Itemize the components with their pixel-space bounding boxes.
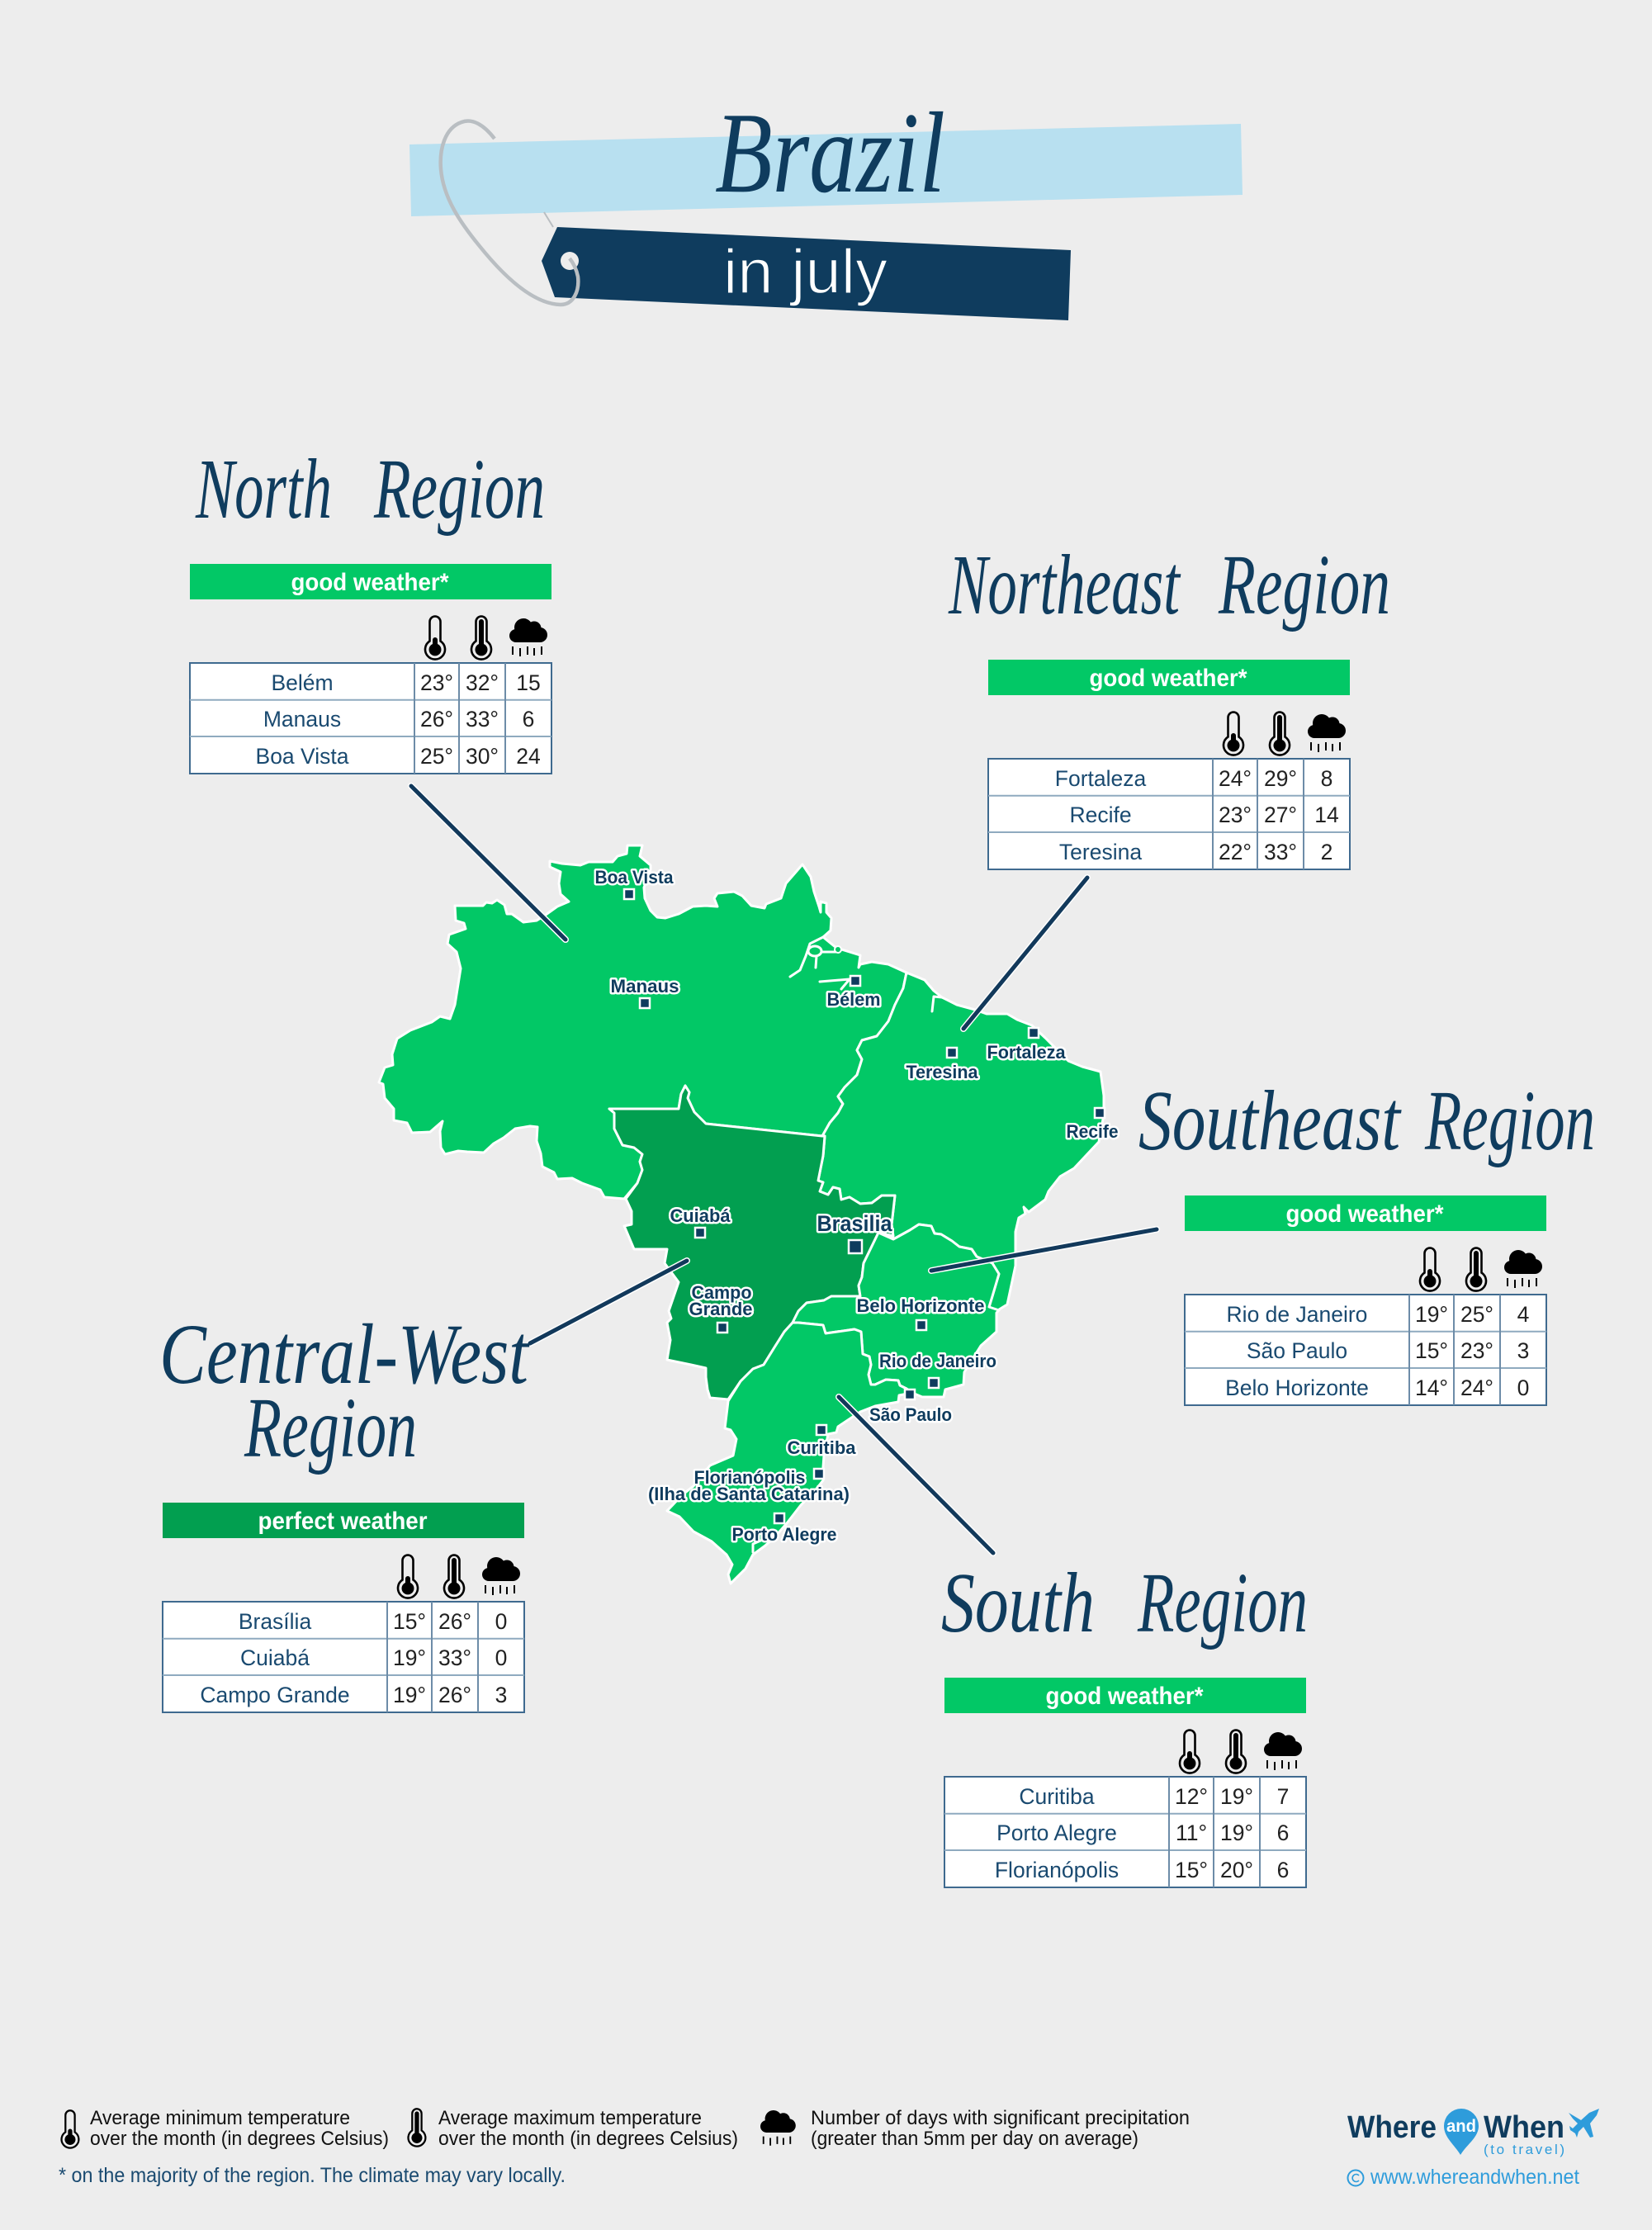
city labels: Florianópolis (693, 1467, 806, 1488)
city labels: Recife (1067, 1121, 1118, 1142)
region: South (667, 1323, 912, 1584)
heading: Central-West Region: Central-West (159, 1307, 530, 1402)
climate table: Florianópolis (995, 1858, 1119, 1882)
climate table (190, 663, 551, 774)
climate table: Belém (271, 670, 334, 695)
climate table: 8 (1321, 766, 1332, 791)
climate table: 0 (495, 1609, 507, 1634)
city labels (594, 867, 1118, 1545)
climate table: 19° (393, 1683, 426, 1707)
table icons (1180, 1730, 1302, 1773)
climate table: 2 (1321, 840, 1332, 864)
climate table: 11° (1176, 1820, 1207, 1845)
weather bar: good weather* (1286, 1200, 1444, 1228)
weather bar (190, 564, 551, 599)
climate table: 24° (1460, 1375, 1493, 1400)
climate table: 27° (1264, 803, 1297, 827)
weather bar (988, 660, 1350, 695)
climate table: 15° (1175, 1858, 1208, 1882)
region: Southeast (793, 1224, 999, 1397)
weather bar: good weather* (291, 569, 449, 596)
climate table: Cuiabá (240, 1645, 310, 1670)
city labels: (Ilha de Santa Catarina) (648, 1484, 850, 1504)
climate table: 26° (438, 1683, 471, 1707)
legend text: minimum temperature: over the month (in degrees Celsius) (90, 2128, 389, 2150)
climate table: 0 (495, 1645, 507, 1670)
city labels: São Paulo (869, 1404, 952, 1425)
city labels: Fortaleza (987, 1042, 1066, 1063)
climate table: 26° (438, 1609, 471, 1634)
tagline: (to travel) (1484, 2142, 1564, 2157)
climate table (1185, 1295, 1546, 1405)
city labels: Manaus (611, 976, 679, 997)
climate table: 19° (1415, 1302, 1448, 1327)
climate table: 0 (1517, 1375, 1529, 1400)
title: Brazil: Brazil (715, 89, 945, 217)
navy luggage tag (542, 227, 1071, 320)
climate table: Porto Alegre (996, 1820, 1117, 1845)
title block (409, 89, 1243, 320)
tag string thin segment (544, 212, 553, 227)
climate table: Manaus (263, 707, 341, 731)
city labels: Brasilia (817, 1211, 892, 1236)
city markers (624, 889, 1105, 1523)
light blue banner (409, 124, 1243, 216)
climate table: 15° (1415, 1338, 1448, 1363)
climate table: 4 (1517, 1302, 1529, 1327)
heading: Central-West Region: Region (244, 1380, 417, 1475)
weather bar (163, 1503, 524, 1538)
legend text: maximum temperature: over the month (in degrees Celsius) (438, 2128, 738, 2150)
legend text: minimum temperature: Average minimum temperature (90, 2107, 350, 2129)
climate table: 26° (420, 707, 453, 731)
heading: Northeast Region: Northeast (948, 537, 1181, 632)
climate table: 30° (466, 744, 499, 769)
city labels: Boa Vista (594, 867, 674, 888)
legend text: precipitation: Number of days with significant precipitation (811, 2107, 1190, 2129)
climate table: 19° (1220, 1820, 1253, 1845)
legend text: precipitation: (greater than 5mm per day on average) (811, 2128, 1138, 2150)
wordmark: When: When (1484, 2110, 1564, 2145)
climate table: 32° (466, 670, 499, 695)
climate table: 24° (1219, 766, 1252, 791)
weather bar: perfect weather (258, 1508, 428, 1535)
climate table: 23° (1219, 803, 1252, 827)
logo: Where and When (1347, 2109, 1599, 2189)
climate table: Recife (1069, 803, 1132, 827)
heading: South Region: South (941, 1555, 1095, 1650)
heading: South Region (941, 1555, 1308, 1650)
city labels: Teresina (906, 1062, 978, 1082)
climate table: Rio de Janeiro (1227, 1302, 1367, 1327)
city labels: Porto Alegre (731, 1524, 837, 1545)
panel: South Region (941, 1555, 1308, 1887)
climate table: 20° (1220, 1858, 1253, 1882)
panel: Northeast Region (948, 537, 1390, 869)
table icons (425, 616, 547, 660)
city labels: Campo (692, 1282, 751, 1303)
region: Northeast (818, 973, 1104, 1311)
climate table: 24 (516, 744, 541, 769)
city labels: Bélem (827, 989, 880, 1010)
legend text: precipitation (811, 2107, 1190, 2150)
climate table: Belo Horizonte (1225, 1375, 1369, 1400)
icon: airplane (1569, 2109, 1599, 2138)
climate table: 33° (1264, 840, 1297, 864)
climate table: 23° (420, 670, 453, 695)
panel: Southeast Region (1138, 1073, 1595, 1405)
climate table: 6 (523, 707, 534, 731)
website: www.whereandwhen.net (1370, 2166, 1579, 2189)
heading: Southeast Region: Southeast (1138, 1073, 1402, 1168)
region: Central-West (609, 1086, 895, 1399)
subtitle: in july: in july (723, 237, 888, 307)
climate table: Fortaleza (1055, 766, 1146, 791)
climate table: 6 (1277, 1820, 1289, 1845)
legend text: minimum temperature (90, 2107, 389, 2150)
climate table: 15° (393, 1609, 426, 1634)
table icons (1420, 1248, 1542, 1291)
climate table: 19° (1220, 1784, 1253, 1809)
heading: North Region (195, 442, 545, 537)
climate table (988, 759, 1350, 869)
climate table: 29° (1264, 766, 1297, 791)
icon: rain cloud (760, 2110, 796, 2146)
river mouth lines (790, 937, 850, 989)
climate table: 3 (1517, 1338, 1529, 1363)
coastal inlet (932, 997, 942, 1011)
climate table (944, 1777, 1306, 1887)
connector lines (411, 786, 1157, 1553)
city labels: Curitiba (788, 1437, 856, 1458)
weather bar: good weather* (1045, 1683, 1204, 1710)
legend text: maximum temperature: Average maximum temperature (438, 2107, 702, 2129)
lagoon line (753, 1534, 776, 1552)
weather bar (1185, 1195, 1546, 1231)
footnote: * on the majority of the region. The climate may vary locally. (59, 2164, 566, 2187)
climate table: Campo Grande (200, 1683, 350, 1707)
climate table: 19° (393, 1645, 426, 1670)
climate table: 14° (1415, 1375, 1448, 1400)
climate table: 7 (1277, 1784, 1289, 1809)
climate table: Brasília (239, 1609, 311, 1634)
copyright icon (1347, 2170, 1364, 2186)
legend (59, 2107, 1190, 2187)
panel: North Region (190, 442, 551, 774)
city labels: Cuiabá (670, 1205, 731, 1226)
table icons (398, 1555, 520, 1598)
table icons (1224, 712, 1346, 755)
icon: map pin (1444, 2109, 1479, 2155)
climate table: Curitiba (1019, 1784, 1095, 1809)
climate table: 25° (1460, 1302, 1493, 1327)
city labels: Grande (689, 1299, 753, 1319)
climate table: 33° (466, 707, 499, 731)
climate table: 22° (1219, 840, 1252, 864)
climate table: 33° (438, 1645, 471, 1670)
heading: Central-West Region (159, 1307, 530, 1475)
panel: Central-West Region (159, 1307, 530, 1712)
climate table: 25° (420, 744, 453, 769)
climate table: 23° (1460, 1338, 1493, 1363)
city labels: Belo Horizonte (857, 1295, 984, 1316)
map of Brazil (379, 786, 1157, 1584)
climate table: 14 (1314, 803, 1339, 827)
icon: minimum thermometer (61, 2110, 78, 2148)
climate table: São Paulo (1247, 1338, 1347, 1363)
icon: maximum thermometer (408, 2109, 425, 2147)
wordmark: and: and (1446, 2117, 1476, 2136)
climate table: 3 (495, 1683, 507, 1707)
weather bar (944, 1678, 1306, 1713)
climate table: 6 (1277, 1858, 1289, 1882)
climate table: 15 (516, 670, 541, 695)
weather bar: good weather* (1090, 665, 1247, 692)
wordmark: Where: Where (1347, 2110, 1437, 2145)
heading: North Region: Region (373, 442, 545, 537)
climate table: Boa Vista (256, 744, 349, 769)
heading: South Region: Region (1137, 1555, 1308, 1650)
heading: Northeast Region: Region (1218, 537, 1390, 632)
city labels: Rio de Janeiro (879, 1351, 996, 1371)
climate table: Teresina (1059, 840, 1142, 864)
legend text: maximum temperature (438, 2107, 738, 2150)
heading: North Region: North (195, 442, 332, 537)
climate table: 12° (1175, 1784, 1208, 1809)
climate table (163, 1602, 524, 1712)
region: North (379, 845, 906, 1199)
ring of the tag (441, 121, 578, 305)
